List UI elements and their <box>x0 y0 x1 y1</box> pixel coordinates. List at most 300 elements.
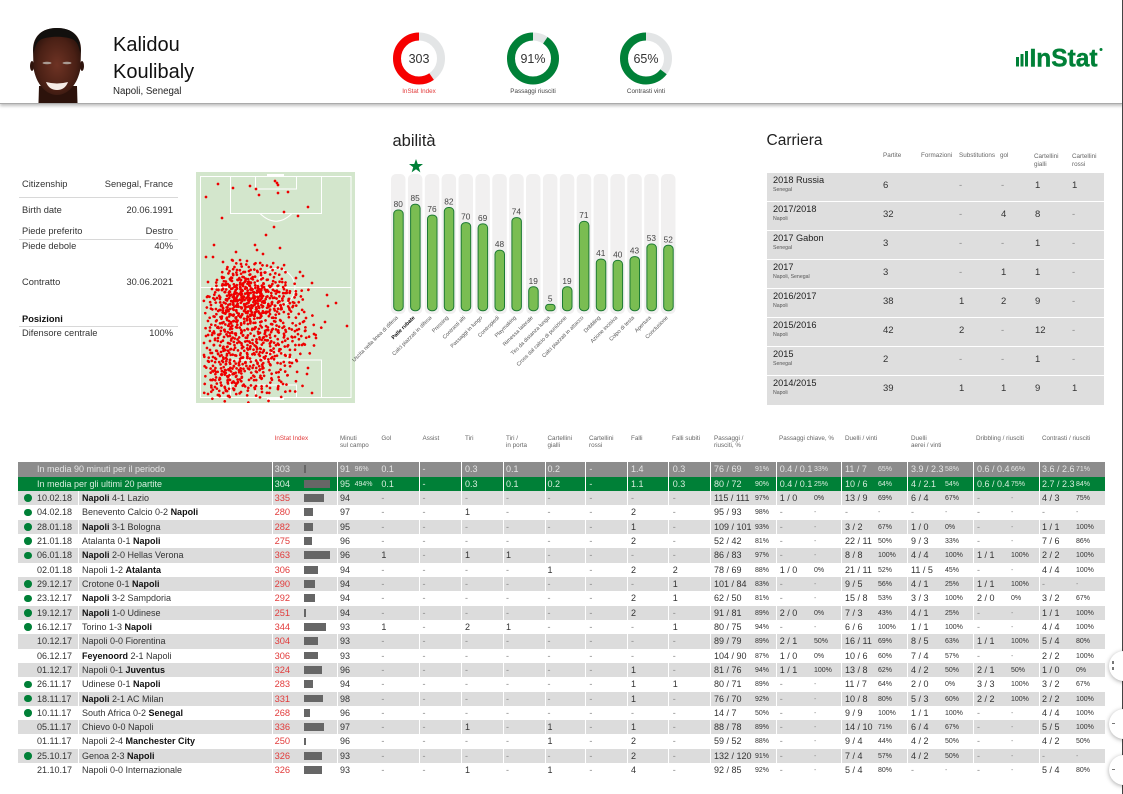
match row 25.10.17: 326 <box>275 751 290 761</box>
career table: 2015/2016 <box>773 320 816 330</box>
career table: - <box>1072 325 1075 336</box>
match row 25.10.17: - <box>814 753 816 760</box>
career table: - <box>959 354 962 365</box>
match row 28.01.18: - <box>506 522 509 532</box>
summary row: last 20 matches: 64% <box>878 481 892 488</box>
player info panel <box>19 179 178 338</box>
match row 26.11.17: 1 <box>673 679 678 689</box>
match row 06.12.17: 1 / 0 <box>780 650 797 660</box>
match row 10.02.18: - <box>589 493 592 503</box>
skills bar chart: 82 <box>444 196 454 206</box>
career table: 3 <box>883 267 888 278</box>
career table: 2017 <box>773 262 793 272</box>
match row 18.11.17: 92% <box>755 696 769 702</box>
career table: 4 <box>1001 209 1006 220</box>
match row 21.01.18: 33% <box>945 538 959 545</box>
match row 26.11.17: 80 / 71 <box>714 679 742 689</box>
match row 06.12.17: 87% <box>755 652 769 660</box>
match row 16.12.17: 100% <box>878 624 896 631</box>
match row 06.12.17: - <box>506 650 509 660</box>
right edge line <box>1122 0 1123 794</box>
match table column headers: Tiri / <box>506 435 518 442</box>
match row 04.02.18: Benevento Calcio 0-2 Napoli <box>82 507 198 517</box>
summary row: average per 90 minutes: 11 / 7 <box>845 464 867 474</box>
summary row: average per 90 minutes: 66% <box>1011 466 1025 473</box>
match row 16.12.17: Torino 1-3 Napoli <box>82 622 152 632</box>
match row 25.10.17 <box>18 749 1105 763</box>
match row 06.12.17: - <box>631 650 634 660</box>
career table: 1 <box>959 296 964 307</box>
match row 01.12.17: - <box>548 665 550 675</box>
match row 18.11.17: 60% <box>945 696 959 702</box>
match row 10.02.18 <box>18 491 1105 505</box>
floating button 3 <box>1109 755 1123 785</box>
match row 06.01.18: - <box>673 550 676 560</box>
match row 19.12.17: - <box>422 608 426 618</box>
match row 01.12.17: - <box>506 665 509 675</box>
donut: Passaggi riusciti: 91% <box>520 52 546 66</box>
match row 05.11.17: - <box>673 722 676 732</box>
career table: Napoli <box>773 332 788 338</box>
skills bar chart: 19 <box>562 276 572 286</box>
match table column headers: rossi <box>589 442 602 449</box>
match row 01.11.17: 4 / 2 <box>1042 736 1060 746</box>
match table column headers: riusciti, % <box>714 442 741 449</box>
match row 01.12.17: - <box>422 665 426 675</box>
match row 01.11.17: - <box>589 736 592 746</box>
summary row: average per 90 minutes: 3.9 / 2.3 <box>911 464 944 474</box>
match row 25.10.17: Genoa 2-3 Napoli <box>82 751 155 761</box>
summary row: average per 90 minutes: 303 <box>275 464 290 474</box>
match row 06.01.18: 100% <box>1076 552 1094 559</box>
match row 23.12.17: 94 <box>340 593 350 603</box>
match table column headers: in porta <box>506 442 527 449</box>
summary row: average per 90 minutes: 33% <box>814 466 828 473</box>
match row 06.01.18: 2 / 2 <box>1042 550 1060 560</box>
match row 25.10.17: - <box>1011 753 1013 760</box>
career table: 2017 Gabon <box>773 233 824 243</box>
match row 21.10.17: - <box>422 765 426 775</box>
summary row: average per 90 minutes: 0.2 <box>548 464 560 474</box>
match row 25.10.17: - <box>780 751 783 761</box>
summary row: last 20 matches: 304 <box>275 479 290 489</box>
match row 01.12.17: 13 / 8 <box>845 665 868 675</box>
player info panel: Piede preferito <box>22 226 82 236</box>
match row 02.01.18: - <box>465 565 468 575</box>
match table column headers: Assist <box>422 435 439 442</box>
match row 10.11.17: 268 <box>275 708 290 718</box>
match row 21.01.18: - <box>977 536 980 546</box>
match row 04.02.18: - <box>1042 507 1045 517</box>
match row 10.12.17: 16 / 11 <box>845 636 872 646</box>
match row 21.01.18: 22 / 11 <box>845 536 872 546</box>
career table: - <box>1001 354 1004 365</box>
match row 19.12.17: - <box>548 608 550 618</box>
summary row: average per 90 minutes: 1.4 <box>631 464 644 474</box>
match row 23.12.17: 1 <box>673 593 678 603</box>
match row 21.10.17: 80% <box>878 767 892 774</box>
career table <box>767 152 1104 405</box>
summary row: average per 90 minutes <box>18 462 1105 477</box>
match row 02.01.18 <box>37 565 1094 575</box>
career table: - <box>1072 209 1075 220</box>
match row 26.11.17: - <box>780 679 783 689</box>
match row 23.12.17: - <box>381 593 384 603</box>
match row 19.12.17: - <box>465 608 468 618</box>
match row 26.11.17: 3 / 3 <box>977 679 995 689</box>
match row 23.12.17: - <box>422 593 426 603</box>
match row 23.12.17: 2 <box>631 593 636 603</box>
match row 01.11.17: 96 <box>340 736 350 746</box>
match row 21.01.18: 275 <box>275 536 290 546</box>
match row 25.10.17: - <box>506 751 509 761</box>
match table column headers: Cartellini <box>589 435 614 442</box>
donut: Passaggi riusciti <box>507 32 559 95</box>
match row 23.12.17: 81% <box>755 595 769 602</box>
match row 06.01.18: 100% <box>878 552 896 559</box>
match row 01.11.17: 2 <box>631 736 636 746</box>
match row 21.10.17: 4 <box>631 765 636 775</box>
career table: - <box>959 209 962 220</box>
match row 10.11.17: 100% <box>878 710 896 717</box>
match row 01.12.17: Napoli 0-1 Juventus <box>82 665 165 675</box>
match row 01.11.17: 44% <box>878 738 892 745</box>
match row 29.12.17 <box>18 577 1105 591</box>
match row 28.01.18: - <box>780 522 783 532</box>
skills bar chart: Uscita nella linea di difesa <box>351 315 400 363</box>
match row 21.10.17: - <box>945 767 947 774</box>
match row 19.12.17: 94 <box>340 608 350 618</box>
match row 29.12.17: - <box>465 579 468 589</box>
skills bar chart: 52 <box>664 234 673 244</box>
match row 18.11.17: 18.11.17 <box>37 694 71 704</box>
match row 26.11.17: 2 / 0 <box>911 679 929 689</box>
match row 05.11.17: 97 <box>340 722 350 732</box>
match row 01.12.17: - <box>381 665 384 675</box>
match row 29.12.17: - <box>780 579 783 589</box>
match row 18.11.17: - <box>814 696 816 702</box>
match row 10.12.17: - <box>673 636 676 646</box>
match row 21.01.18: - <box>465 536 468 546</box>
career table: - <box>1072 238 1075 249</box>
match row 10.12.17: 2 / 1 <box>780 636 797 646</box>
match row 21.01.18: 21.01.18 <box>37 536 72 546</box>
career table: 1 <box>1001 267 1006 278</box>
match row 10.12.17: 100% <box>1011 638 1029 645</box>
match row 21.10.17: 1 <box>465 765 470 775</box>
match row 18.11.17: - <box>422 694 426 704</box>
match row 10.12.17: 50% <box>814 638 828 645</box>
match row 18.11.17: 98 <box>340 694 350 704</box>
match row 25.10.17: - <box>422 751 426 761</box>
match row 19.12.17: - <box>506 608 509 618</box>
match row 01.11.17: - <box>977 736 980 746</box>
match row 06.12.17: 0% <box>814 652 824 660</box>
match row 02.01.18: 45% <box>945 567 959 574</box>
match row 18.11.17: 100% <box>1011 696 1029 702</box>
match row 01.11.17: 88% <box>755 738 769 745</box>
match row 26.11.17: 26.11.17 <box>37 679 71 689</box>
summary row: last 20 matches: - <box>422 479 426 489</box>
player info panel: Senegal, France <box>105 179 173 189</box>
match row 06.01.18: 97% <box>755 552 769 559</box>
match row 05.11.17: 1 <box>548 722 553 732</box>
career table: Substitutions <box>959 152 995 159</box>
donut: Contrasti vinti <box>620 32 672 95</box>
match row 10.02.18: - <box>673 493 676 503</box>
career table: 2017/2018 <box>773 204 816 214</box>
match row 01.11.17: - <box>381 736 384 746</box>
match row 18.11.17 <box>18 692 1105 706</box>
match row 21.01.18: 52 / 42 <box>714 536 742 546</box>
match row 26.11.17: - <box>506 679 509 689</box>
match row 02.01.18: 0% <box>814 567 824 574</box>
match row 26.11.17: 94 <box>340 679 350 689</box>
match row 16.12.17: - <box>814 624 816 631</box>
match row 05.11.17: Chievo 0-0 Napoli <box>82 722 154 732</box>
match row 10.02.18: 75% <box>1076 495 1090 502</box>
match row 10.11.17: - <box>977 708 980 718</box>
match row 10.02.18: 67% <box>945 495 959 502</box>
match row 21.01.18: - <box>1011 538 1013 545</box>
match row 29.12.17: - <box>589 579 592 589</box>
match row 01.12.17: 1 <box>631 665 636 675</box>
match row 16.12.17 <box>24 622 1094 632</box>
match row 02.01.18: Napoli 1-2 Atalanta <box>82 565 161 575</box>
match row 16.12.17: 1 <box>381 622 386 632</box>
skills bar chart: Playmaking <box>494 315 518 339</box>
summary row: last 20 matches: 494% <box>355 481 372 488</box>
skills bar chart: Pressing <box>431 315 450 334</box>
summary row: average per 90 minutes: 0.6 / 0.4 <box>977 464 1010 474</box>
match row 01.12.17: 2 / 1 <box>977 665 995 675</box>
match row 18.11.17: - <box>780 694 783 704</box>
match row 26.11.17: - <box>381 679 384 689</box>
match row 18.11.17: - <box>381 694 384 704</box>
career table: - <box>1001 238 1004 249</box>
match row 01.11.17: - <box>465 736 468 746</box>
match row 05.11.17: - <box>422 722 426 732</box>
match row 10.02.18: Napoli 4-1 Lazio <box>82 493 149 503</box>
match row 05.11.17: - <box>589 722 592 732</box>
match row 21.10.17: - <box>911 765 914 775</box>
match row 01.12.17: - <box>673 665 676 675</box>
match row 23.12.17: Napoli 3-2 Sampdoria <box>82 593 171 603</box>
player info panel: Difensore centrale <box>22 328 97 338</box>
match row 06.01.18: Napoli 2-0 Hellas Verona <box>82 550 184 560</box>
match row 01.12.17: 94% <box>755 667 769 674</box>
match row 06.12.17: 57% <box>945 652 959 660</box>
match row 10.02.18: 10.02.18 <box>37 493 72 503</box>
match row 29.12.17: 1 <box>673 579 678 589</box>
match row 06.12.17: - <box>548 650 550 660</box>
match row 10.02.18: 0% <box>814 495 824 502</box>
match row 28.01.18: 1 / 0 <box>911 522 929 532</box>
match row 21.10.17: - <box>977 765 980 775</box>
match row 10.11.17: - <box>631 708 634 718</box>
match row 21.10.17: 80% <box>1076 767 1090 774</box>
match row 21.10.17: - <box>1011 767 1013 774</box>
career table: 1 <box>1035 267 1040 278</box>
skills bar chart: Colpo di testa <box>608 315 636 343</box>
match row 01.12.17: 324 <box>275 665 290 675</box>
match row 06.01.18: 06.01.18 <box>37 550 72 560</box>
match row 28.01.18: 95 <box>340 522 350 532</box>
match row 21.10.17: 5 / 4 <box>845 765 863 775</box>
summary row: last 20 matches: In media per gli ultimi 20 partite <box>37 479 162 489</box>
heading: Carriera: Carriera <box>766 132 822 149</box>
summary row: last 20 matches <box>18 477 1105 491</box>
player info panel: Destro <box>146 226 173 236</box>
match row 26.11.17: 3 / 2 <box>1042 679 1060 689</box>
match row 19.12.17: Napoli 1-0 Udinese <box>82 608 161 618</box>
match row 02.01.18: - <box>977 565 980 575</box>
career table: Senegal <box>773 186 792 192</box>
match table column headers: Gol <box>381 435 391 442</box>
skills bar chart: Azione incisiva <box>590 315 619 345</box>
match row 16.12.17: 1 / 1 <box>911 622 929 632</box>
career table: - <box>1001 180 1004 191</box>
skills bar chart: 19 <box>529 276 538 286</box>
career table: rossi <box>1072 161 1085 168</box>
career table: - <box>1072 267 1075 278</box>
skills bar chart: Dribbling <box>583 315 602 334</box>
match row 19.12.17: 251 <box>275 608 290 618</box>
player name: Kalidou <box>113 34 180 56</box>
match row 04.02.18: - <box>1076 509 1078 516</box>
match row 06.12.17: 60% <box>878 652 892 660</box>
skills bar chart <box>351 174 676 368</box>
match row 26.11.17: 0% <box>945 681 955 688</box>
match row 16.12.17: - <box>1011 624 1013 631</box>
match row 25.10.17: 25.10.17 <box>37 751 72 761</box>
player photo <box>30 28 84 103</box>
match row 23.12.17: 15 / 8 <box>845 593 868 603</box>
match row 19.12.17: - <box>673 608 676 618</box>
career table: 1 <box>1035 354 1040 365</box>
match row 01.12.17: 1 / 0 <box>1042 665 1060 675</box>
skills bar chart: Rimessa laterale <box>502 315 535 348</box>
match row 29.12.17: - <box>1042 579 1045 589</box>
match row 06.12.17: 104 / 90 <box>714 650 747 660</box>
match row 02.01.18: 4 / 4 <box>1042 565 1060 575</box>
match row 02.01.18: - <box>381 565 384 575</box>
match row 26.11.17: 67% <box>1076 681 1090 688</box>
floating button 1 <box>1109 651 1123 681</box>
summary row: average per 90 minutes: 91% <box>755 466 769 473</box>
match row 16.12.17: 4 / 4 <box>1042 622 1060 632</box>
match row 02.01.18: 88% <box>755 567 769 574</box>
match row 04.02.18: - <box>945 509 947 516</box>
match row 21.01.18: 50% <box>878 538 892 545</box>
player info panel: Birth date <box>22 205 62 215</box>
floating button 2 <box>1109 709 1123 739</box>
match row 21.01.18 <box>24 536 1090 546</box>
skills bar chart: 71 <box>579 210 589 220</box>
match row 05.11.17: - <box>814 724 816 731</box>
match row 10.02.18: 1 / 0 <box>780 493 797 503</box>
career table: 42 <box>883 325 894 336</box>
match row 05.11.17: - <box>780 722 783 732</box>
match row 23.12.17: - <box>780 593 783 603</box>
match row 28.01.18: 3 / 2 <box>845 522 863 532</box>
match row 21.10.17: 326 <box>275 765 290 775</box>
match table column headers: sul campo <box>340 442 369 449</box>
match row 28.01.18: 1 / 1 <box>1042 522 1060 532</box>
match row 06.01.18: 96 <box>340 550 350 560</box>
match row 04.02.18: - <box>878 509 880 516</box>
match row 01.11.17: 250 <box>275 736 290 746</box>
match row 18.11.17: - <box>589 694 592 704</box>
career table: gol <box>1000 152 1008 159</box>
match row 01.11.17: 50% <box>945 738 959 745</box>
match row 06.01.18: 1 <box>465 550 470 560</box>
match row 10.02.18: 97% <box>755 495 769 502</box>
career table: 32 <box>883 209 894 220</box>
summary row: last 20 matches: 10 / 6 <box>845 479 868 489</box>
match row 06.12.17: - <box>465 650 468 660</box>
match row 02.01.18: 306 <box>275 565 290 575</box>
match row 28.01.18: Napoli 3-1 Bologna <box>82 522 161 532</box>
match row 19.12.17: 100% <box>1076 610 1094 617</box>
career table: Napoli <box>773 302 788 308</box>
match row 16.12.17: 80 / 75 <box>714 622 742 632</box>
match row 06.12.17 <box>37 650 1094 661</box>
player info panel: Contratto <box>22 277 60 287</box>
match row 26.11.17: - <box>589 679 592 689</box>
match row 05.11.17: 14 / 10 <box>845 722 873 732</box>
skills bar chart: Apertura <box>634 315 653 334</box>
career table: 1 <box>1035 238 1040 249</box>
skills bar chart: 53 <box>647 233 656 243</box>
match table column headers: Dribbling / riusciti <box>976 435 1024 442</box>
match row 28.01.18: - <box>422 522 426 532</box>
match row 01.12.17: 50% <box>945 667 959 674</box>
match row 29.12.17: 29.12.17 <box>37 579 72 589</box>
match row 28.01.18: 100% <box>1076 524 1094 531</box>
match row 29.12.17: 94 <box>340 579 350 589</box>
match row 21.01.18: 86% <box>1076 538 1090 545</box>
match row 01.12.17: - <box>589 665 592 675</box>
match row 23.12.17: - <box>589 593 592 603</box>
career table: 2 <box>883 354 888 365</box>
career table: 1 <box>1001 383 1006 394</box>
match row 05.11.17: - <box>381 722 384 732</box>
career table: 1 <box>1072 383 1077 394</box>
match row 23.12.17: 292 <box>275 593 290 603</box>
match row 06.01.18: - <box>631 550 634 560</box>
summary row: last 20 matches: 0.4 / 0.1 <box>780 479 812 489</box>
skills bar chart: Calci piazzati in difesa <box>391 315 433 357</box>
match row 02.01.18: 1 / 0 <box>780 565 797 575</box>
match row 04.02.18: 95 / 93 <box>714 507 742 517</box>
match row 02.01.18: 100% <box>1076 567 1094 574</box>
match row 05.11.17: 5 / 5 <box>1042 722 1060 732</box>
summary row: last 20 matches: 25% <box>814 481 828 488</box>
skills bar chart: Contrasti alti <box>442 315 467 341</box>
match row 25.10.17: 91% <box>755 753 769 760</box>
summary row: last 20 matches: 4 / 2.1 <box>911 479 936 489</box>
match row 05.11.17: 71% <box>878 724 892 731</box>
match row 19.12.17: 25% <box>945 610 959 617</box>
match row 01.11.17: - <box>422 736 426 746</box>
match row 29.12.17: 25% <box>945 581 959 588</box>
skills bar chart: 69 <box>478 213 488 223</box>
match row 04.02.18: - <box>422 507 426 517</box>
match row 06.01.18: - <box>814 552 816 559</box>
career table: 9 <box>1035 296 1040 307</box>
career table: - <box>1072 354 1075 365</box>
